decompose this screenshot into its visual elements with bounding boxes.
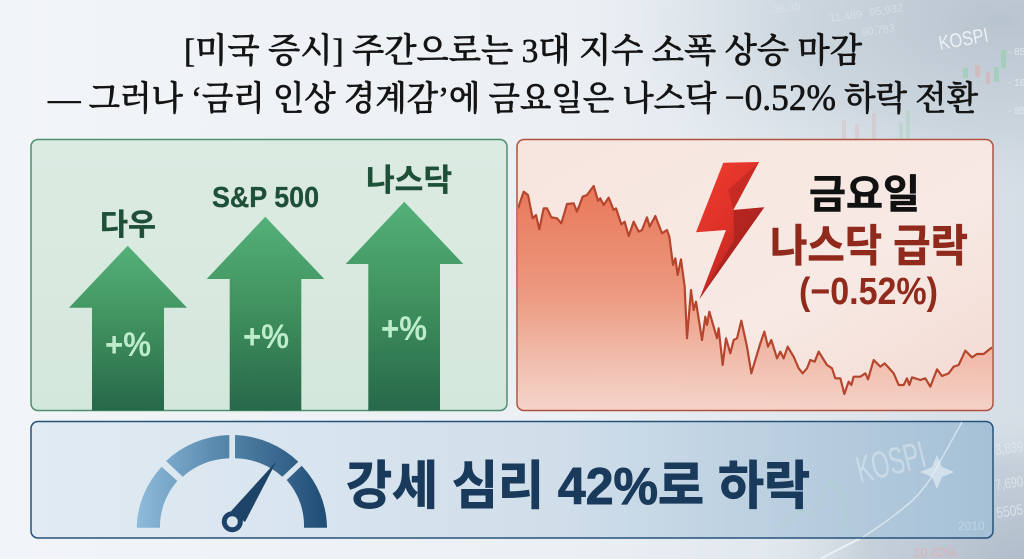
watermark: KOSPI bottom: 2010: [958, 519, 985, 533]
arrow: S&P 500: S&P 500: [212, 182, 319, 214]
title: [미국 증시] 주간으로는 3대 지수 소폭 상승 마감: [184, 32, 862, 70]
watermark: KOSPI top: KOSPI: [937, 25, 990, 55]
arrow: Dow: [69, 209, 187, 410]
arrow: S&P 500: +%: [243, 318, 289, 356]
arrow: Dow: +%: [105, 326, 151, 364]
arrow: Nasdaq: +%: [381, 310, 427, 348]
background: 11,489: [829, 9, 863, 25]
text: Friday Nasdaq plunge: 금요일: [809, 173, 920, 217]
title: — 그러나 ‘금리 인상 경계감’에 금요일은 나스닥 −0.52% 하락 전환: [47, 78, 978, 119]
panel: bullish sentiment: [31, 422, 993, 538]
title: [47, 32, 978, 119]
text: sentiment fell to 42%: 강세 심리 42%로 하락: [346, 458, 810, 516]
text: Friday Nasdaq plunge: [770, 173, 968, 313]
background: 90,783: [861, 22, 896, 39]
text: Friday Nasdaq plunge: (−0.52%): [799, 271, 938, 313]
background: 95,932: [869, 2, 904, 19]
panel: friday drop: [517, 140, 994, 411]
panel: weekly gains: [31, 140, 507, 410]
arrow: Dow: 다우: [100, 209, 156, 242]
arrow: Nasdaq: 나스닥: [366, 163, 452, 198]
arrow: S&P 500: [207, 182, 324, 410]
watermark: KOSPI bottom: KOSPI: [852, 434, 930, 492]
chart: Nasdaq price line: [517, 186, 994, 411]
arrow: Nasdaq: [346, 163, 463, 410]
text: Friday Nasdaq plunge: 나스닥 급락: [770, 222, 968, 271]
icon: gauge: [137, 435, 327, 532]
background: -36.35: [769, 1, 801, 17]
watermark: KOSPI bottom: [780, 422, 985, 537]
icon: lightning bolt: [696, 162, 764, 299]
